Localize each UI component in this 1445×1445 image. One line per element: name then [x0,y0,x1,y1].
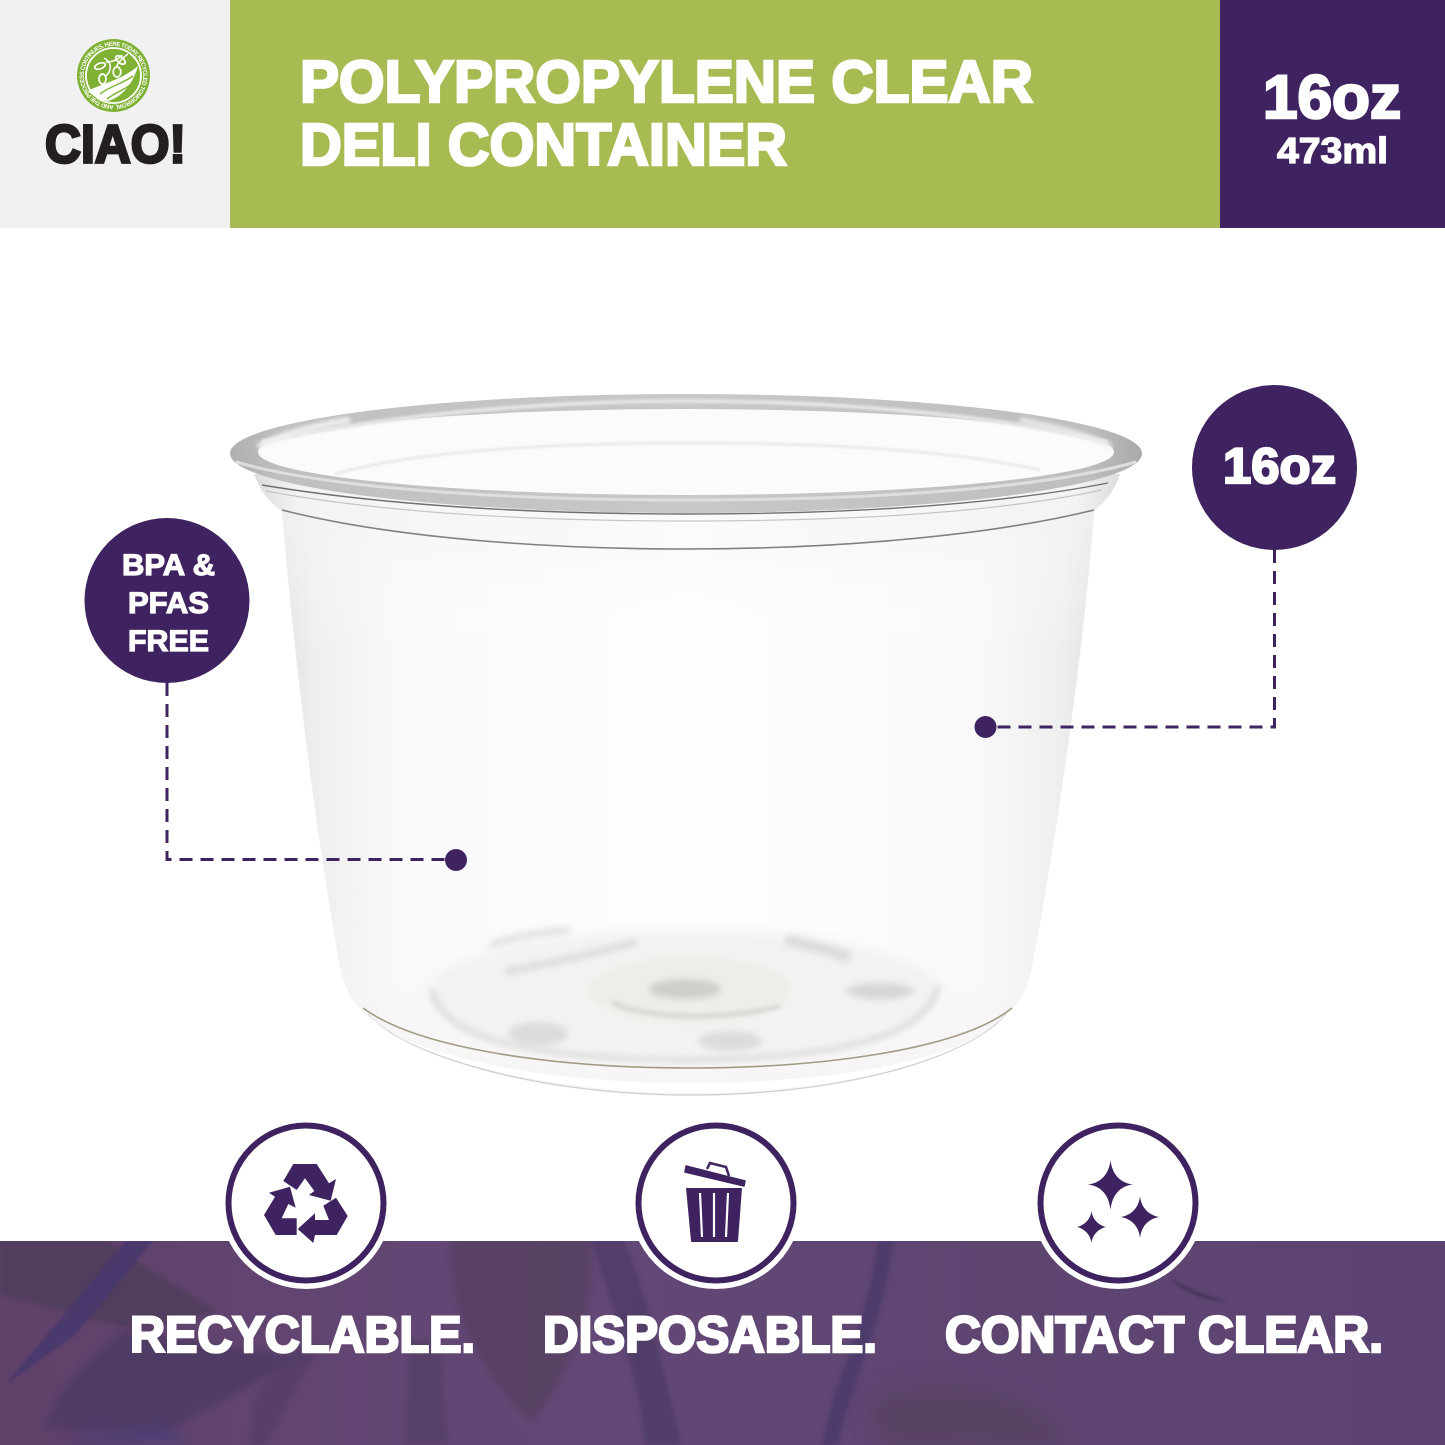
size oz: 16oz [1263,63,1401,131]
band leaf texture [0,1236,1228,1445]
icon: sparkles [1077,1160,1159,1243]
header: logo panel [0,0,230,228]
badge: recyclable [220,1117,392,1289]
base rim lines [363,1008,1012,1068]
title: POLYPROPYLENE CLEAR [300,49,1033,115]
label: disposable: DISPOSABLE. [543,1306,877,1363]
callout dot [445,849,467,871]
callout circle [84,518,250,683]
logo wordmark: CIAO! [45,114,186,174]
label: recyclable: RECYCLABLE. [130,1306,475,1363]
header: title panel [230,0,1220,228]
title: DELI CONTAINER [300,112,787,178]
callout circle [1192,385,1357,550]
header: size panel [1220,0,1445,228]
logo badge: AND THE PROCESS CONTINUES. HERE TODAY, RECYCLED TOMORROW, [80,42,148,110]
callout text: FREE [128,625,209,658]
callout leader [167,683,456,860]
product: clear deli container [230,394,1142,1096]
container body [282,510,1094,1096]
badge: disposable [630,1117,802,1289]
callout: 16oz [974,385,1357,738]
container base [428,929,940,1060]
size ml: 473ml [1277,130,1388,171]
callout dot [974,716,996,738]
callout text: BPA & [122,549,215,582]
callout text: PFAS [128,587,209,620]
badge: contact clear [1032,1117,1204,1289]
callout: BPA and PFAS free [84,518,467,871]
callout leader [985,550,1274,727]
icon: trash can [685,1163,745,1242]
callout text: 16oz [1223,438,1336,494]
icon: recycle [264,1164,348,1243]
label: contact clear: CONTACT CLEAR. [945,1306,1383,1363]
container rim [230,394,1142,549]
bottom band [0,1236,1445,1445]
